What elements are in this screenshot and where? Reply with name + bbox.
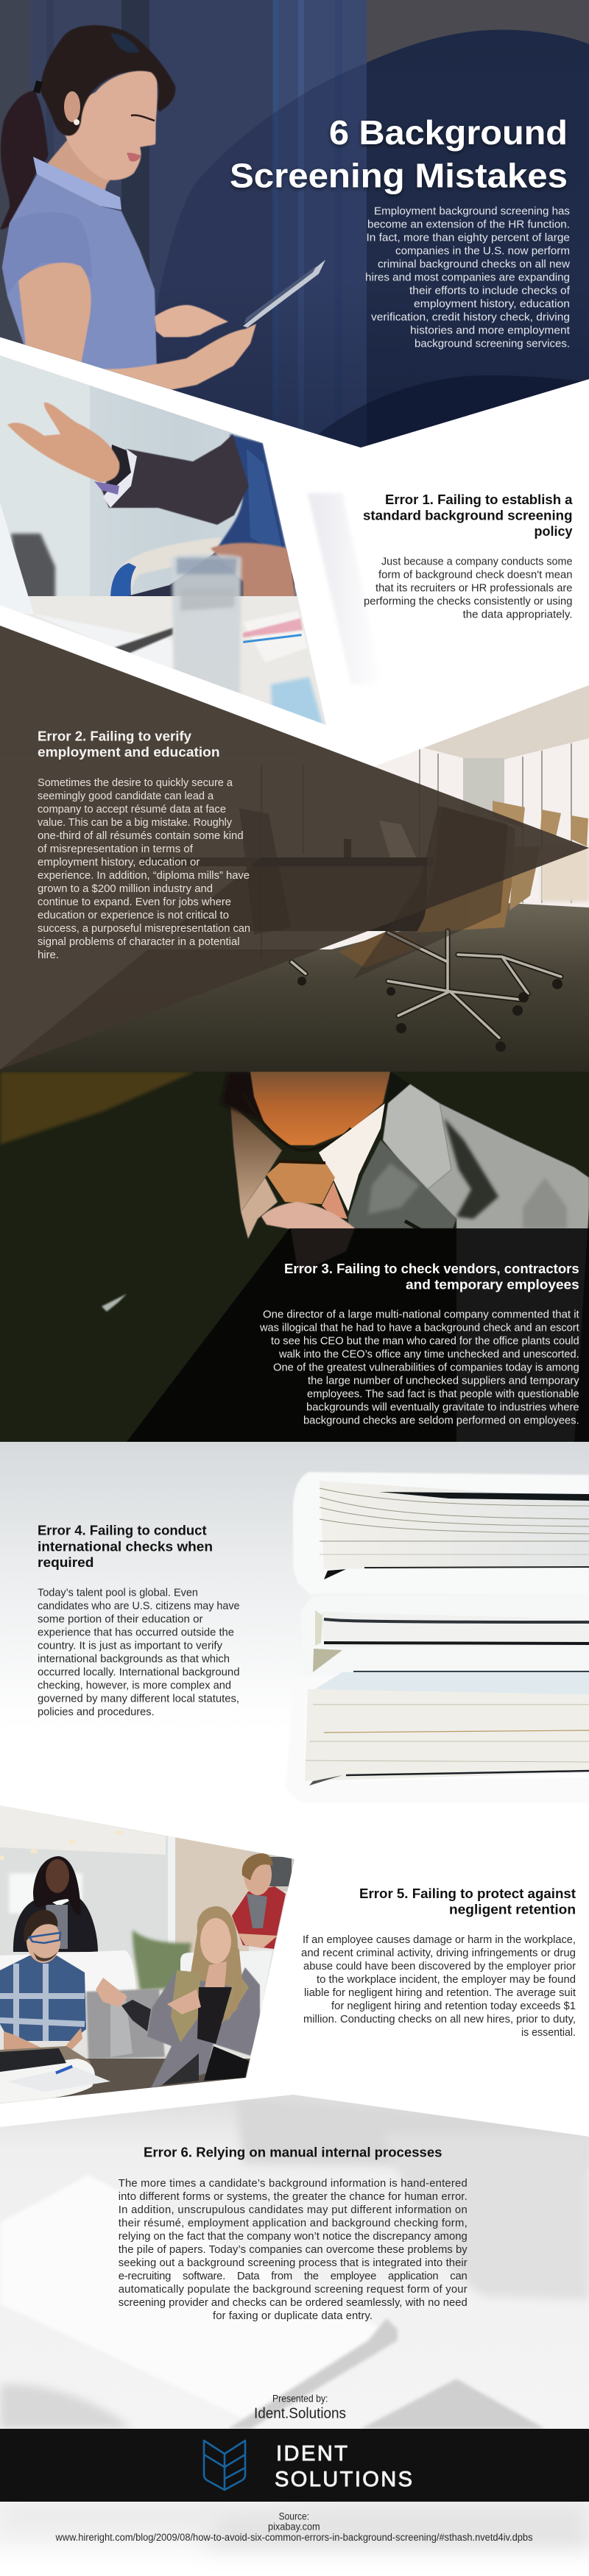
panel: error 2 dark triangle — [0, 626, 589, 1069]
text: intro paragraph: hires and most companies are expanding — [365, 272, 570, 284]
cushion and floor — [86, 1989, 165, 2059]
woman standing: jacket — [13, 1897, 98, 1952]
forearm and lower hand — [88, 324, 256, 390]
dark shadow beside neck — [221, 1072, 263, 1122]
lower lapel — [348, 1140, 456, 1228]
tablet — [243, 260, 325, 328]
text: sources — [55, 2511, 533, 2543]
heading: error 4: Error 4. Failing to conduct — [38, 1523, 207, 1538]
paragraph: error 3: walk into the CEO’s office any time unchecked and unescorted. — [278, 1349, 579, 1361]
paragraph: error 6: the pile of papers. Today’s companies can overcome these problems by — [119, 2244, 468, 2256]
paragraph: error 4: policies and procedures. — [38, 1706, 155, 1718]
heading: error 1: standard background screening — [363, 508, 573, 523]
text: intro paragraph: histories and more employment — [410, 325, 570, 337]
logo wordmark — [275, 2442, 412, 2491]
paragraph: error 3: background checks are seldom performed on employees. — [303, 1415, 579, 1427]
pin glint — [102, 1294, 127, 1312]
paragraph: error 5: to the workplace incident, the employer may be found — [317, 1974, 576, 1986]
paragraph: error 3: employees. The sad fact is that people with questionable — [307, 1389, 579, 1401]
glass — [169, 552, 244, 693]
paragraph: error 1: that its recruiters or HR professionals are — [375, 582, 573, 594]
hand — [261, 1202, 355, 1273]
chair arm — [110, 537, 221, 600]
paragraph: error 6 — [119, 2178, 468, 2322]
panel: hero background — [0, 0, 589, 456]
plant — [133, 1930, 191, 1991]
face — [63, 71, 158, 180]
paragraph: error 6: their résumé, employment application and background checking form, — [119, 2218, 468, 2229]
paragraph: error 2 — [38, 777, 250, 961]
seat backs — [0, 1950, 136, 1996]
paragraph: error 4: Today’s talent pool is global. Even — [38, 1587, 198, 1599]
paragraph: error 6: e-recruiting software. Data from the employee application can — [119, 2271, 468, 2282]
photo: meeting gesture — [0, 353, 331, 729]
upper arm — [18, 263, 91, 364]
ear and earring — [64, 91, 80, 122]
heading: error 2: Error 2. Failing to verify — [38, 729, 192, 743]
text: sources: pixabay.com — [268, 2522, 320, 2533]
woman centre: coat — [147, 1967, 260, 2088]
text: sources: Source: — [279, 2511, 309, 2522]
paragraph: error 4 — [38, 1587, 240, 1718]
text: intro paragraph: employment history, education — [414, 299, 570, 311]
text: intro paragraph: their efforts to include checks of — [409, 286, 571, 297]
heading: error 2 — [38, 729, 219, 760]
ponytail — [0, 91, 49, 230]
paragraph: error 3: the large number of unchecked suppliers and temporary — [308, 1376, 579, 1387]
heading: error 1 — [363, 492, 573, 539]
heading: error 2: employment and education — [38, 744, 219, 760]
background corner — [0, 1072, 195, 1144]
photo: stack of books — [0, 1442, 589, 1825]
woman centre: hands and sleeve — [96, 1978, 127, 2007]
heading: main title — [230, 113, 568, 194]
neck — [38, 140, 110, 207]
laptop and table — [24, 596, 325, 724]
watch — [109, 445, 131, 486]
woman centre: hair back — [188, 1906, 243, 2024]
table, papers and laptop — [0, 2059, 95, 2103]
paragraph: error 4: country. It is just as important to verify — [38, 1640, 223, 1652]
heading: error 5 — [359, 1886, 576, 1917]
illustration: woman with tablet — [0, 25, 325, 390]
blue jacket — [214, 434, 298, 604]
heading: error 3 — [284, 1261, 579, 1292]
paragraph: error 6: screening provider and checks can be ordered seamlessly, with no need — [119, 2297, 468, 2309]
paragraph: error 2: continue to expand. Even for jobs where — [38, 896, 231, 908]
footer bar — [0, 2429, 589, 2502]
left collar — [230, 1103, 282, 1211]
collar — [33, 157, 121, 210]
text: intro paragraph: background screening services. — [415, 339, 570, 350]
text: intro paragraph: Employment background screening has — [374, 206, 570, 218]
paragraph: error 5: liable for negligent hiring and retention. The average suit — [304, 1987, 576, 1999]
heading: error 1: policy — [535, 523, 573, 539]
paragraph: error 6: The more times a candidate’s background information is hand-entered — [119, 2178, 468, 2190]
text block: error 2 — [38, 729, 250, 961]
paragraph: error 6: for faxing or duplicate data entry. — [213, 2310, 373, 2322]
paragraph: error 3: was illogical that he had to have a background check and an escort — [259, 1323, 579, 1334]
jacket shoulder — [425, 1103, 589, 1443]
panel: soft shadow beside first photo — [308, 493, 383, 684]
hair — [40, 25, 175, 135]
heading: error 4 — [38, 1523, 213, 1570]
text: intro paragraph: companies in the U.S. now perform — [395, 246, 570, 258]
paragraph: error 2: employment history, education or — [38, 857, 200, 868]
paragraph: error 2: Sometimes the desire to quickly secure a — [38, 777, 233, 789]
text block: error 3 — [259, 1261, 579, 1427]
shirt body — [2, 174, 157, 372]
book 1 — [293, 1472, 589, 1596]
man with glasses: head — [27, 1919, 60, 1963]
paragraph: error 2: signal problems of character in a potential — [38, 936, 240, 948]
paragraph: error 2: experience. In addition, “diploma mills” have — [38, 870, 250, 882]
heading: error 5: negligent retention — [449, 1902, 576, 1917]
logo wordmark: IDENT — [276, 2442, 348, 2466]
paragraph: error 5: and recent criminal activity, driving infringements or drug — [301, 1947, 576, 1959]
paragraph: error 4: candidates who are U.S. citizens may have — [38, 1600, 240, 1612]
photo: man adjusting tie — [0, 1072, 589, 1443]
dark sleeve — [102, 434, 249, 525]
heading: error 4: required — [38, 1554, 94, 1570]
heading: error 1: Error 1. Failing to establish a — [385, 492, 573, 507]
text: intro paragraph — [365, 206, 571, 350]
text block: error 1 — [363, 492, 573, 620]
man in red — [232, 1886, 286, 1949]
hair tie — [33, 80, 43, 93]
conference table block — [339, 930, 417, 968]
paragraph: error 1: Just because a company conducts some — [381, 556, 573, 567]
paragraph: error 3: One director of a large multi-national company commented that it — [263, 1309, 579, 1321]
paragraph: error 2: hire. — [38, 949, 59, 961]
text: presented by — [254, 2393, 346, 2421]
woman standing: hair — [33, 1856, 81, 1915]
paragraph: error 5: for negligent hiring and retention today exceeds $1 — [331, 2000, 576, 2012]
text: intro paragraph: criminal background checks on all new — [378, 259, 570, 271]
photo: team meeting — [0, 1803, 302, 2112]
text: presented by: Presented by: — [272, 2393, 328, 2405]
panel: error 6 background — [0, 2090, 589, 2576]
paragraph: error 5: million. Conducting checks on all new hires, prior to duty, — [303, 2014, 576, 2025]
paragraph: error 5: If an employee causes damage or harm in the workplace, — [303, 1934, 576, 1946]
paragraph: error 2: one-third of all résumés contain some kind — [38, 830, 244, 842]
chair backs — [493, 801, 525, 823]
paragraph: error 6: In addition, unscrupulous candidates may put different information on — [119, 2204, 468, 2216]
man with glasses: shirt — [0, 1956, 86, 2041]
paragraph: error 3: One of the greatest vulnerabilities of companies today is among — [273, 1362, 579, 1374]
chair bases — [292, 931, 561, 1038]
paragraph: error 4: experience that has occurred outside the — [38, 1627, 234, 1638]
paragraph: error 1: performing the checks consistently or using — [364, 595, 573, 607]
paragraph: error 2: education or experience is not critical to — [38, 910, 229, 921]
paragraph: error 6: into different forms or systems, the greater the chance for human error. — [119, 2191, 468, 2203]
paragraph: error 5 — [301, 1934, 576, 2039]
hand — [7, 403, 119, 482]
text block: error 6 — [119, 2145, 468, 2322]
pin — [405, 1221, 427, 1234]
faint boardroom details — [0, 758, 508, 979]
upper lapel — [383, 1084, 451, 1192]
paragraph: error 4: international backgrounds as that which — [38, 1653, 230, 1665]
paragraph: error 4: checking, however, is more complex and — [38, 1680, 231, 1691]
paragraph: error 3 — [259, 1309, 579, 1427]
text: intro paragraph: become an extension of the HR function. — [367, 219, 570, 231]
text block: error 4 — [38, 1523, 240, 1718]
neck — [250, 1072, 390, 1145]
paragraph: error 2: seemingly good candidate can lead a — [38, 790, 214, 802]
white collar — [319, 1072, 392, 1211]
logo wordmark: SOLUTIONS — [275, 2468, 412, 2491]
paragraph: error 4: some portion of their education or — [38, 1613, 203, 1625]
heading: error 3: Error 3. Failing to check vendors, contractors — [284, 1261, 579, 1276]
book 3 — [309, 1672, 589, 1696]
man with glasses: forearms — [4, 2031, 46, 2053]
paragraph: error 2: company to accept résumé data at face — [38, 804, 226, 815]
woman standing: face — [46, 1859, 69, 1893]
photo: boardroom — [0, 684, 589, 1075]
panel: error 3 dark overlay — [127, 1228, 589, 1442]
paragraph: error 4: governed by many different local statutes, — [38, 1693, 239, 1705]
heading: error 4: international checks when — [38, 1538, 213, 1554]
paragraph: error 1: the data appropriately. — [463, 609, 573, 620]
eye, nose and mouth — [131, 116, 155, 121]
paragraph: error 4: occurred locally. International background — [38, 1666, 240, 1678]
paragraph: error 1: form of background check doesn't mean — [378, 569, 573, 581]
paragraph: error 5: is essential. — [521, 2027, 576, 2039]
grey chair back left — [11, 534, 55, 600]
dark band at lapel — [381, 1072, 410, 1128]
paragraph: error 2: grown to a $200 million industry and — [38, 883, 213, 895]
paragraph: error 6: relying on the fact that the company won’t notice the discrepancy among — [119, 2231, 468, 2243]
text: presented by: Ident.Solutions — [254, 2405, 346, 2421]
tie — [267, 1163, 335, 1204]
woman centre: face — [200, 1918, 231, 1964]
text: intro paragraph: In fact, more than eighty percent of large — [367, 233, 570, 244]
text: intro paragraph: verification, credit history check, driving — [371, 312, 570, 324]
paragraph: error 6: seeking out a background screening process that is integrated into their — [119, 2257, 468, 2269]
paragraph: error 2: success, a purposeful misrepresentation can — [38, 923, 250, 935]
second hand — [211, 543, 296, 602]
paragraph: error 5: abuse could have been discovered by the employer prior — [303, 1961, 576, 1972]
upper hand — [155, 305, 228, 337]
heading: main title: Screening Mistakes — [230, 156, 568, 194]
paragraph: error 2: value. This can be a big mistake. Roughly — [38, 817, 233, 829]
paragraph: error 2: of misrepresentation in terms of — [38, 843, 194, 855]
icon: Ident Solutions shield logo — [204, 2441, 245, 2490]
carpet — [0, 903, 589, 1072]
heading: error 5: Error 5. Failing to protect against — [359, 1886, 576, 1901]
book 2 — [300, 1596, 589, 1677]
text: sources: www.hireright.com/blog/2009/08/how-to-avoid-six-common-errors-in-background-screening/#sthash.nvetd4iv.dpbs — [55, 2532, 533, 2543]
paragraph: error 6: automatically populate the background screening request form of your — [119, 2284, 468, 2296]
paragraph: error 1 — [364, 556, 573, 620]
heading: main title: 6 Background — [329, 113, 568, 152]
shoulder shadow — [444, 1118, 498, 1219]
heading: error 3: and temporary employees — [406, 1277, 579, 1292]
woman centre: legs and folder — [162, 2053, 199, 2085]
paragraph: error 3: to see his CEO but the man who cared for the office plants could — [271, 1336, 579, 1348]
text block: error 5 — [301, 1886, 576, 2039]
paragraph: error 3: backgrounds will eventually gravitate to industries where — [306, 1402, 579, 1414]
heading: error 6: Error 6. Relying on manual internal processes — [144, 2145, 442, 2160]
